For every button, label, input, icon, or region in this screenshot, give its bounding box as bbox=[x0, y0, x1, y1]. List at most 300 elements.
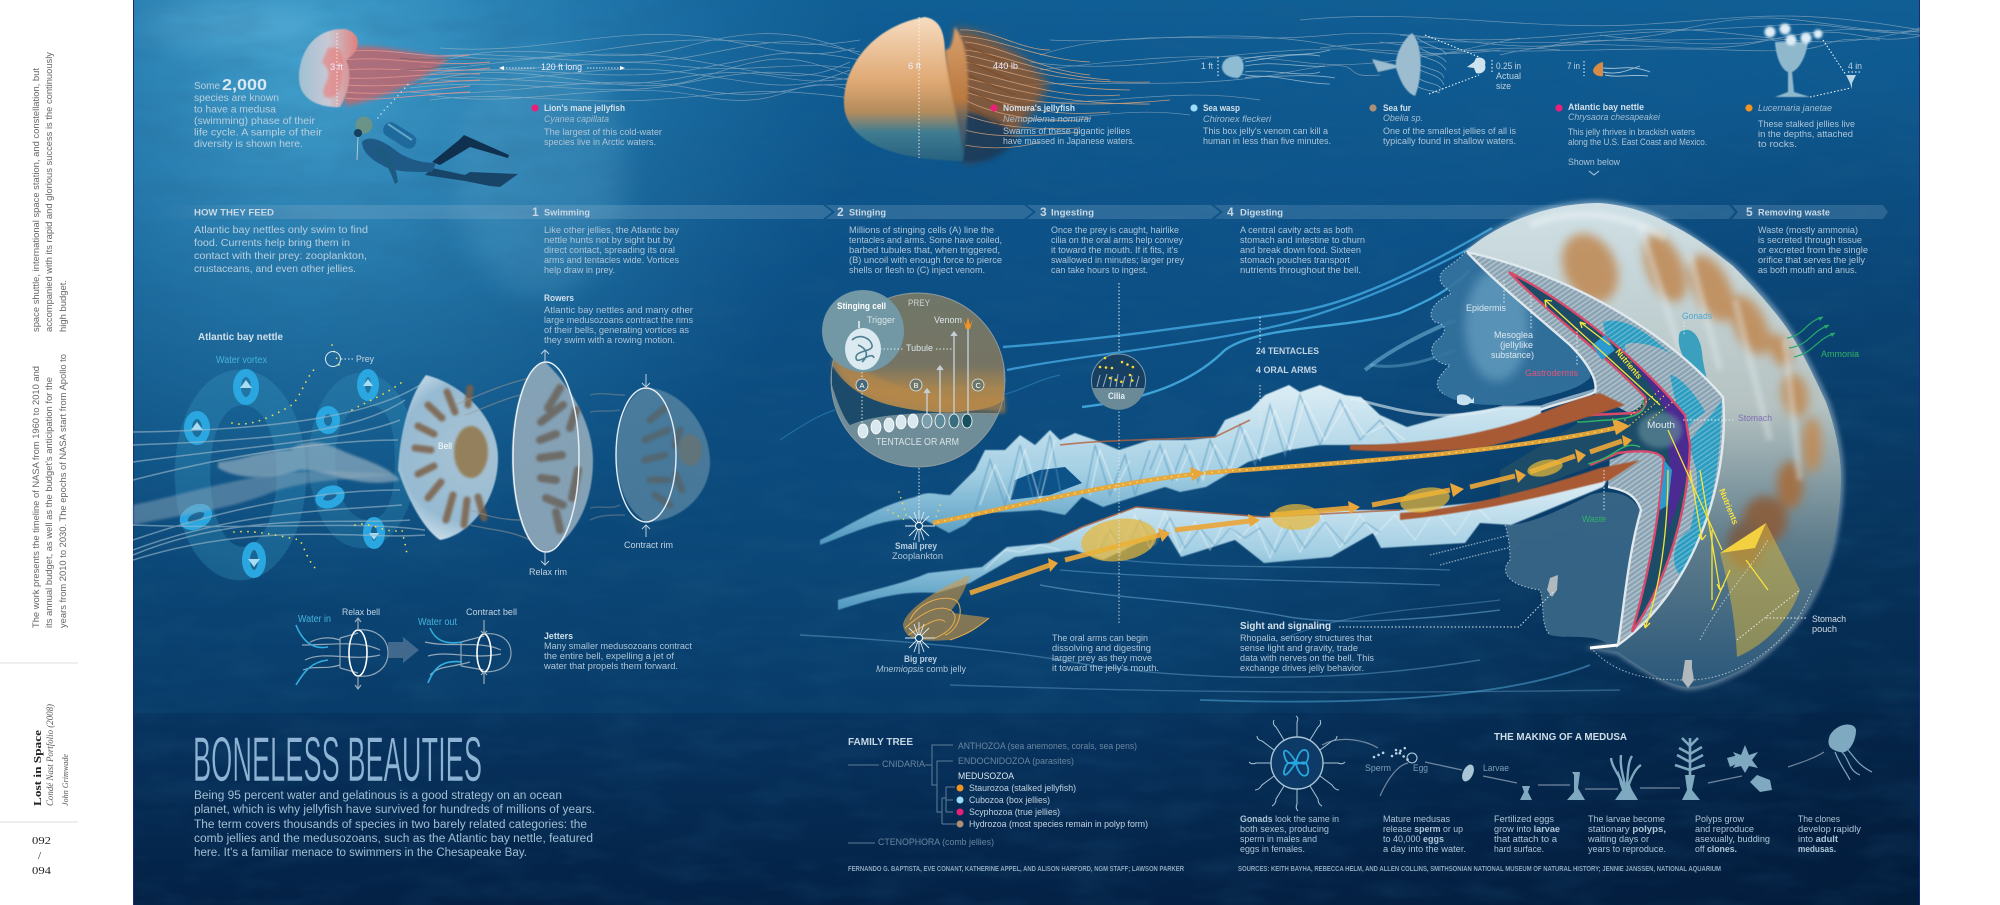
cilia inset bbox=[1092, 283, 1146, 625]
header arrow band bbox=[156, 205, 1888, 219]
oral arm: lower bbox=[838, 460, 1640, 610]
page numbers: 094 bbox=[32, 865, 52, 877]
teal stomach pieces bbox=[1592, 335, 1672, 510]
jet propulsion diagram bbox=[296, 607, 693, 689]
prey label bbox=[326, 352, 374, 366]
sidebar note: first paragraph bbox=[31, 354, 69, 628]
anatomy labels bbox=[1466, 280, 1859, 640]
step 2: stinging: barbed tubules that, when triggered, bbox=[849, 245, 1000, 255]
oral arm: upper bbox=[820, 385, 1625, 545]
sources: SOURCES: KEITH BAYHA, REBECCA HELM, AND ALLEN COLLINS, SMITHSONIAN NATIONAL MUSEUM OF NATURAL HISTORY; JENNIE JANSSEN, NATIONAL AQUARIUM bbox=[1238, 866, 1721, 873]
stomach pouch: Stomach bbox=[1812, 614, 1846, 624]
bubbles bbox=[378, 82, 410, 118]
jellyfish: Nomura's bbox=[844, 17, 1170, 163]
step 2: stinging: tentacles and arms. Some have coiled, bbox=[849, 235, 1002, 245]
jellyfish: sea fur: Actual bbox=[1496, 71, 1521, 82]
taxa labels: CNIDARIA bbox=[882, 759, 926, 770]
step 1: swimming: Like other jellies, the Atlantic bay bbox=[544, 225, 680, 235]
taxa labels: ANTHOZOA (sea anemones, corals, sea pens) bbox=[958, 741, 1137, 752]
cycle captions: The larvae become bbox=[1588, 814, 1665, 824]
label: big prey bbox=[876, 654, 966, 674]
intro: 2,000 species: Some bbox=[194, 80, 220, 92]
oral arms note: larger prey as they move bbox=[1052, 653, 1152, 663]
species label: sea fur: Obelia sp. bbox=[1383, 113, 1423, 123]
jelly outline: relaxed bbox=[302, 618, 388, 689]
sight and signaling note: exchange drives jelly behavior. bbox=[1240, 663, 1364, 673]
species label: Atlantic bay nettle bbox=[1555, 102, 1707, 175]
label: big prey: Mnemiopsis comb jelly bbox=[876, 664, 966, 674]
jellyfish: sea fur: 0.25 in bbox=[1496, 61, 1521, 72]
labels in circle: PREY bbox=[908, 298, 930, 308]
intro: 2,000 species: life cycle. A sample of their bbox=[194, 126, 323, 138]
step 4: digesting: stomach and intestine to churn bbox=[1240, 235, 1365, 245]
label: tentacles and oral arms bbox=[1256, 317, 1319, 427]
labels: Relax bell bbox=[342, 607, 380, 618]
venom burst bbox=[963, 317, 973, 329]
jellyfish: lion's mane bbox=[299, 29, 490, 107]
cycle captions: The clones bbox=[1798, 814, 1840, 824]
rowers text: Rowers bbox=[544, 293, 574, 303]
intro paragraph bbox=[194, 790, 595, 859]
sidebar: commentary and folio bbox=[0, 52, 78, 877]
cycle captions: and reproduce bbox=[1695, 824, 1754, 834]
species label: sea fur: typically found in shallow waters. bbox=[1383, 136, 1516, 146]
section: how they feed: contact with their prey: zooplankton, bbox=[194, 250, 367, 262]
waste flow bbox=[1577, 400, 1644, 464]
label: tentacles and oral arms: 4 ORAL ARMS bbox=[1256, 365, 1317, 376]
label: small prey: Zooplankton bbox=[892, 551, 943, 561]
sidebar note: first paragraph: years from 2010 to 2030. The epochs of NASA start from Apollo to bbox=[58, 354, 69, 628]
gonads: Gonads bbox=[1682, 311, 1712, 321]
species label: sea wasp: This box jelly's venom can kill a bbox=[1203, 126, 1328, 136]
step 3: ingesting: Once the prey is caught, hairlike bbox=[1051, 225, 1179, 235]
cycle captions: hard surface. bbox=[1494, 844, 1544, 854]
step 3: ingesting: 3 bbox=[1040, 205, 1047, 219]
jetters text bbox=[543, 631, 693, 671]
jellyfish: sea wasp: 1 ft bbox=[1201, 61, 1213, 72]
step 4: digesting bbox=[1227, 205, 1365, 275]
cycle captions: grow into larvae bbox=[1494, 824, 1560, 834]
cycle captions: to 40,000 eggs bbox=[1383, 834, 1444, 844]
label: small prey bbox=[892, 541, 943, 561]
prey dots bbox=[232, 345, 407, 568]
step 4: digesting: 4 bbox=[1227, 205, 1234, 219]
step 5: removing waste: is secreted through tissue bbox=[1758, 235, 1862, 245]
branch: ctenophora line bbox=[848, 842, 875, 844]
adult medusa bbox=[1828, 725, 1872, 780]
section: how they feed: HOW THEY FEED bbox=[194, 208, 274, 218]
cycle captions: waiting days or bbox=[1587, 834, 1649, 844]
species label: lion's mane bbox=[531, 103, 662, 147]
dimension: 3 ft: 3 ft bbox=[330, 62, 343, 73]
prey route: big prey arrow bbox=[970, 435, 1632, 593]
step 5: removing waste: as both mouth and anus. bbox=[1758, 265, 1857, 275]
page numbers bbox=[32, 835, 52, 877]
step 4: digesting: and break down food. Sixteen bbox=[1240, 245, 1361, 255]
heading: family tree: FAMILY TREE bbox=[848, 736, 913, 748]
circle: prey and tentacle bbox=[831, 293, 1005, 467]
species label: Atlantic bay nettle: Chrysaora chesapeakei bbox=[1568, 112, 1661, 122]
labels bbox=[298, 607, 517, 628]
text: BONELESS BEAUTIES bbox=[193, 725, 482, 795]
dimension: 120 ft long bbox=[499, 62, 625, 73]
species label: Atlantic bay nettle: Atlantic bay nettle bbox=[1568, 102, 1644, 112]
species label: Atlantic bay nettle: along the U.S. East Coast and Mexico. bbox=[1568, 137, 1707, 147]
step 5: removing waste: 5 bbox=[1746, 205, 1753, 219]
lower marginal dotted outline bbox=[1591, 540, 1812, 680]
step 3: ingesting: swallowed in minutes; larger prey bbox=[1051, 255, 1184, 265]
jetters text: water that propels them forward. bbox=[543, 661, 678, 671]
species label: Atlantic bay nettle: Shown below bbox=[1568, 157, 1620, 167]
epidermis bbox=[1466, 280, 1506, 313]
step 4: digesting: stomach pouches transport bbox=[1240, 255, 1351, 265]
contracting bell bbox=[590, 374, 710, 537]
stomach pouch: pouch bbox=[1812, 624, 1837, 634]
sidebar note: first paragraph: The work presents the timeline of NASA from 1960 to 2010 and bbox=[31, 366, 42, 628]
life cycle arrows bbox=[1322, 739, 1824, 796]
life cycle: the making of a medusa bbox=[1240, 716, 1872, 854]
cilia inset: Cilia bbox=[1108, 391, 1126, 401]
step 5: removing waste bbox=[1746, 205, 1868, 275]
cycle captions: that attach to a bbox=[1494, 834, 1557, 844]
water in arrows bbox=[296, 625, 328, 685]
species label: lion's mane: Cyanea capillata bbox=[544, 114, 609, 124]
comb jelly prey bbox=[903, 575, 989, 641]
tubules bbox=[924, 326, 968, 414]
bell cross-section wedge bbox=[1467, 252, 1724, 645]
step 2: stinging: 2 bbox=[837, 205, 844, 219]
sidebar title: Condé Nast Portfolio (2008) bbox=[45, 704, 56, 806]
jellyfish: sea fur bbox=[1372, 33, 1521, 96]
medusa gonads icon bbox=[1249, 716, 1345, 811]
step 5: removing waste: Waste (mostly ammonia) bbox=[1758, 225, 1858, 235]
markers A B C bbox=[856, 379, 984, 391]
heading: THE MAKING OF A MEDUSA bbox=[1494, 732, 1627, 743]
step 1: swimming: nettle hunts not by sight but by bbox=[544, 235, 674, 245]
oral arms note: The oral arms can begin bbox=[1052, 633, 1148, 643]
cycle captions: eggs in females. bbox=[1240, 844, 1305, 854]
sight and signaling note: Rhopalia, sensory structures that bbox=[1240, 633, 1372, 643]
cycle captions: Gonads look the same in bbox=[1240, 814, 1339, 824]
sperm and egg bbox=[1365, 748, 1428, 773]
rowers text bbox=[544, 293, 693, 345]
cycle captions: years to reproduce. bbox=[1588, 844, 1666, 854]
species label: sea wasp: Chironex fleckeri bbox=[1203, 114, 1272, 124]
labels in circle bbox=[862, 298, 962, 448]
rowers text: large medusozoans contract the rims bbox=[544, 315, 693, 325]
step 1: swimming: direct contact, spreading its oral bbox=[544, 245, 675, 255]
sight and signaling note bbox=[1240, 592, 1553, 673]
species label: Lucernaria: in the depths, attached bbox=[1758, 129, 1853, 139]
sidebar note: second paragraph bbox=[31, 52, 69, 332]
species label: sea fur: One of the smallest jellies of all is bbox=[1383, 126, 1516, 136]
red gastrodermis lines bbox=[1509, 272, 1690, 632]
taxa labels: Staurozoa (stalked jellyfish) bbox=[969, 783, 1076, 794]
section: how they feed bbox=[194, 208, 368, 275]
step 3: ingesting: Ingesting bbox=[1051, 208, 1094, 218]
rhopalium icons bbox=[1547, 575, 1694, 688]
larva bbox=[1460, 763, 1509, 783]
ammonia bbox=[1787, 317, 1859, 359]
cycle captions: off clones. bbox=[1695, 844, 1737, 854]
purple stomach band bbox=[1618, 345, 1690, 530]
intro paragraph: comb jellies and the medusozoans, such as the Atlantic bay nettle, featured bbox=[194, 833, 593, 845]
water out arrows bbox=[428, 628, 462, 683]
weight: 440 lb: 440 lb bbox=[993, 61, 1018, 72]
epidermis: Epidermis bbox=[1466, 303, 1506, 313]
species label: Nomura's: Nemopilema nomurai bbox=[1003, 114, 1092, 124]
intro: 2,000 species bbox=[194, 77, 323, 150]
step 2: stinging: Stinging bbox=[849, 208, 886, 218]
sidebar note: second paragraph: high budget. bbox=[58, 280, 69, 332]
cycle captions: develop rapidly bbox=[1798, 824, 1862, 834]
intro paragraph: here. It's a familiar menace to swimmers in the Chesapeake Bay. bbox=[194, 847, 527, 859]
jellyfish: Atlantic bay nettle small bbox=[1567, 61, 1650, 76]
gastric cavity bbox=[1500, 272, 1690, 632]
species label: Nomura's bbox=[990, 103, 1135, 146]
sperm and egg: Sperm bbox=[1365, 763, 1391, 773]
larva: Larvae bbox=[1483, 763, 1509, 773]
intro paragraph: The term covers thousands of species in two barely related categories: the bbox=[194, 819, 587, 831]
cycle captions: Polyps grow bbox=[1695, 814, 1744, 824]
mesoglea: substance) bbox=[1491, 350, 1534, 360]
sight and signaling note: data with nerves on the bell. This bbox=[1240, 653, 1374, 663]
stomach pouch bbox=[1737, 590, 1846, 640]
waste: Waste bbox=[1582, 514, 1606, 524]
intro paragraph: Being 95 percent water and gelatinous is a good strategy on an ocean bbox=[194, 790, 562, 802]
dimension: 3 ft bbox=[330, 33, 343, 107]
jetters text: Jetters bbox=[544, 631, 573, 641]
step 2: stinging bbox=[837, 205, 1002, 275]
species label: Lucernaria: Lucernaria janetae bbox=[1758, 103, 1832, 113]
label: tentacles and oral arms: 24 TENTACLES bbox=[1256, 346, 1319, 357]
jelly outline: contracted bbox=[425, 620, 511, 684]
step 2: stinging: Millions of stinging cells (A) line the bbox=[849, 225, 994, 235]
big jellyfish tentacles bbox=[780, 228, 1620, 702]
gonad bbox=[1679, 330, 1709, 400]
gonads bbox=[1682, 311, 1712, 335]
taxa labels: ENDOCNIDOZOA (parasites) bbox=[958, 756, 1074, 767]
jetters text: the entire bell, expelling a jet of bbox=[544, 651, 675, 661]
cycle captions: Fertilized eggs bbox=[1494, 814, 1555, 824]
cycle captions: stationary polyps, bbox=[1588, 824, 1666, 834]
labels in circle: Venom bbox=[934, 315, 962, 325]
step 3: ingesting: cilia on the oral arms help convey bbox=[1051, 235, 1183, 245]
step 1: swimming: help draw in prey. bbox=[544, 265, 615, 275]
intro paragraph: planet, which is why jellyfish have survived for hundreds of millions of years. bbox=[194, 804, 595, 816]
species label: Nomura's: have massed in Japanese waters. bbox=[1003, 136, 1135, 146]
taxa labels: Scyphozoa (true jellies) bbox=[969, 807, 1060, 818]
step 2: stinging: (B) uncoil with enough force to pierce bbox=[849, 255, 1002, 265]
stomach pouch bbox=[1720, 523, 1800, 657]
nettle swimming diagram bbox=[133, 332, 710, 580]
sidebar note: first paragraph: its annual budget, as well as the budget's anticipation for the bbox=[44, 377, 55, 628]
taxa labels: CTENOPHORA (comb jellies) bbox=[878, 837, 994, 848]
species label: Lucernaria bbox=[1745, 103, 1855, 149]
label: big prey: Big prey bbox=[904, 654, 937, 664]
jellyfish: sea wasp bbox=[1201, 50, 1335, 84]
section: how they feed: Atlantic bay nettles only swim to find bbox=[194, 224, 368, 236]
oral arms note: it toward the jelly's mouth. bbox=[1052, 663, 1159, 673]
page numbers: 092 bbox=[32, 835, 51, 847]
big jellyfish bell bbox=[1431, 200, 1844, 690]
intro: 2,000 species: 2,000 bbox=[222, 77, 267, 94]
step 3: ingesting: can take hours to ingest. bbox=[1051, 265, 1148, 275]
cycle captions: both sexes, producing bbox=[1240, 824, 1329, 834]
nettle bell bbox=[398, 375, 498, 540]
dimension: 120 ft long: 120 ft long bbox=[541, 62, 582, 73]
mouth dots bbox=[1625, 390, 1675, 425]
labels in circle: Tubule bbox=[906, 343, 933, 353]
species label: Atlantic bay nettle: This jelly thrives in brackish waters bbox=[1568, 127, 1695, 137]
step 3: ingesting bbox=[1040, 205, 1184, 275]
rowers text: Atlantic bay nettles and many other bbox=[544, 305, 693, 315]
oral arms note: dissolving and digesting bbox=[1052, 643, 1151, 653]
label: contract rim: Contract rim bbox=[624, 540, 673, 551]
jellyfish: sea fur: size bbox=[1496, 81, 1511, 92]
section: how they feed: crustaceans, and even other jellies. bbox=[194, 263, 356, 275]
step 1: swimming: 1 bbox=[532, 205, 539, 219]
step 1: swimming: Swimming bbox=[544, 208, 590, 218]
mouth: Mouth bbox=[1647, 420, 1675, 430]
cycle captions: medusas. bbox=[1798, 844, 1836, 854]
vortex rings bbox=[175, 370, 416, 580]
step 1: swimming bbox=[532, 205, 680, 275]
species label: lion's mane: The largest of this cold-water bbox=[544, 127, 662, 137]
nettle bell: Bell bbox=[438, 441, 452, 452]
taxa labels bbox=[878, 741, 1148, 848]
scuba diver bbox=[354, 116, 518, 187]
credits: FERNANDO G. BAPTISTA, EVE CONANT, KATHERINE APPEL, AND ALISON HARFORD, NGM STAFF; LAWSON PARKER bbox=[848, 866, 1184, 873]
nutrients lower: Nutrients bbox=[1717, 487, 1741, 526]
teal gonad hatch bbox=[1603, 321, 1722, 575]
oral arms note bbox=[1052, 633, 1159, 673]
intro: 2,000 species: diversity is shown here. bbox=[194, 138, 303, 150]
step 2: stinging: shells or flesh to (C) inject venom. bbox=[849, 265, 985, 275]
cycle captions: sperm in males and bbox=[1240, 834, 1317, 844]
step 4: digesting: nutrients throughout the bell. bbox=[1240, 265, 1361, 275]
jellyfish: Atlantic bay nettle small: 7 in bbox=[1567, 61, 1580, 72]
mesoglea bbox=[1491, 295, 1534, 360]
sperm and egg: Egg bbox=[1413, 763, 1428, 773]
long tentacle stream bbox=[410, 16, 1920, 121]
label: small prey: Small prey bbox=[895, 541, 937, 551]
family tree bbox=[848, 736, 1148, 848]
stomach bbox=[1683, 413, 1772, 423]
stinging cell circle bbox=[822, 290, 904, 372]
sidebar title bbox=[32, 704, 70, 806]
jellyfish: Lucernaria stalked: 4 in bbox=[1848, 61, 1862, 72]
species label: lion's mane: species live in Arctic waters. bbox=[544, 137, 656, 147]
cycle captions: into adult bbox=[1798, 834, 1838, 844]
step 1: swimming: arms and tentacles wide. Vortices bbox=[544, 255, 679, 265]
mesoglea: (jellylike bbox=[1500, 340, 1533, 350]
polyp stages bbox=[1520, 738, 1772, 800]
subumbrella lower with lappets bbox=[1505, 492, 1640, 645]
section: how they feed: food. Currents help bring them in bbox=[194, 237, 350, 249]
cycle captions: Mature medusas bbox=[1383, 814, 1450, 824]
species label: Nomura's: Swarms of these gigantic jellies bbox=[1003, 126, 1130, 136]
tree connector lines bbox=[848, 745, 956, 824]
ammonia: Ammonia bbox=[1821, 349, 1859, 359]
cycle captions: a day into the water. bbox=[1383, 844, 1466, 854]
jetters text: Many smaller medusozoans contract bbox=[544, 641, 693, 651]
sight and signaling note: sense light and gravity, trade bbox=[1240, 643, 1358, 653]
waste bbox=[1582, 470, 1606, 524]
step 4: digesting: Digesting bbox=[1240, 208, 1283, 218]
intro: 2,000 species: (swimming) phase of their bbox=[194, 115, 315, 127]
rowers text: of their bells, generating vortices as bbox=[544, 325, 690, 335]
species label: sea wasp bbox=[1190, 103, 1331, 146]
nutrients upper: Nutrients bbox=[1613, 347, 1644, 381]
gastrodermis: Gastrodermis bbox=[1525, 368, 1578, 378]
markers A B C: B bbox=[914, 381, 919, 390]
subumbrella upper with lappets bbox=[1431, 252, 1591, 405]
step 5: removing waste: or excreted from the single bbox=[1758, 245, 1868, 255]
step 5: removing waste: orifice that serves the jelly bbox=[1758, 255, 1866, 265]
species label: Lucernaria: These stalked jellies live bbox=[1758, 119, 1855, 129]
small and big prey markers bbox=[888, 468, 940, 654]
page numbers: / bbox=[38, 850, 42, 862]
species label: sea fur: Sea fur bbox=[1383, 103, 1411, 113]
cycle captions: release sperm or up bbox=[1383, 824, 1463, 834]
rowers text: they swim with a rowing motion. bbox=[544, 335, 675, 345]
label: water vortex: Water vortex bbox=[216, 355, 267, 366]
step 3: ingesting: it toward the mouth. If it fits, it's bbox=[1051, 245, 1179, 255]
species label: sea wasp: Sea wasp bbox=[1203, 103, 1240, 113]
large direction arrow bbox=[388, 637, 419, 663]
taxa labels: Hydrozoa (most species remain in polyp form) bbox=[969, 819, 1148, 830]
dimension: 6 ft: 6 ft bbox=[908, 61, 921, 72]
cycle captions: asexually, budding bbox=[1695, 834, 1770, 844]
prey route: small prey arrow bbox=[933, 418, 1630, 523]
step 4: digesting: A central cavity acts as both bbox=[1240, 225, 1353, 235]
mesoglea: Mesoglea bbox=[1494, 330, 1533, 340]
sight and signaling note: Sight and signaling bbox=[1240, 621, 1331, 632]
gastrodermis bbox=[1525, 328, 1578, 378]
species label: sea fur bbox=[1369, 103, 1516, 146]
species label: lion's mane: Lion's mane jellyfish bbox=[544, 103, 625, 113]
sidebar note: second paragraph: space shuttle, international space station, and constellation, but bbox=[31, 68, 42, 332]
relaxing bell bbox=[455, 350, 593, 565]
sidebar title: Lost in Space bbox=[32, 730, 44, 806]
label: Atlantic bay nettle: Atlantic bay nettle bbox=[198, 332, 283, 343]
prey label: Prey bbox=[356, 354, 374, 365]
intro: 2,000 species: to have a medusa bbox=[194, 104, 276, 116]
species label: sea wasp: human in less than five minutes. bbox=[1203, 136, 1331, 146]
stinging cell stages bbox=[858, 414, 972, 438]
stinging diagram bbox=[822, 290, 1005, 467]
step 5: removing waste: Removing waste bbox=[1758, 208, 1830, 218]
label: relax rim: Relax rim bbox=[529, 567, 567, 578]
pale mouth area bbox=[1638, 412, 1682, 448]
markers A B C: A bbox=[860, 381, 865, 390]
sidebar title: John Grimwade bbox=[60, 754, 70, 806]
sidebar note: second paragraph: accompanied with its rapid and glorious success is the continuously bbox=[44, 52, 55, 332]
stinging cell circle: Trigger bbox=[867, 315, 895, 325]
labels: Water out bbox=[418, 617, 457, 628]
species label: Nomura's: Nomura's jellyfish bbox=[1003, 103, 1075, 113]
stinging cell circle: Stinging cell bbox=[837, 301, 886, 311]
labels in circle: TENTACLE OR ARM bbox=[876, 437, 959, 448]
tentacles and oral arms bbox=[133, 385, 425, 560]
taxa labels: Cubozoa (box jellies) bbox=[969, 795, 1050, 806]
cycle captions bbox=[1240, 814, 1862, 854]
nutrient flow arrows bbox=[1545, 300, 1768, 628]
labels: Water in bbox=[298, 614, 331, 625]
labels: Contract bell bbox=[466, 607, 517, 618]
intro: 2,000 species: species are known bbox=[194, 92, 279, 104]
